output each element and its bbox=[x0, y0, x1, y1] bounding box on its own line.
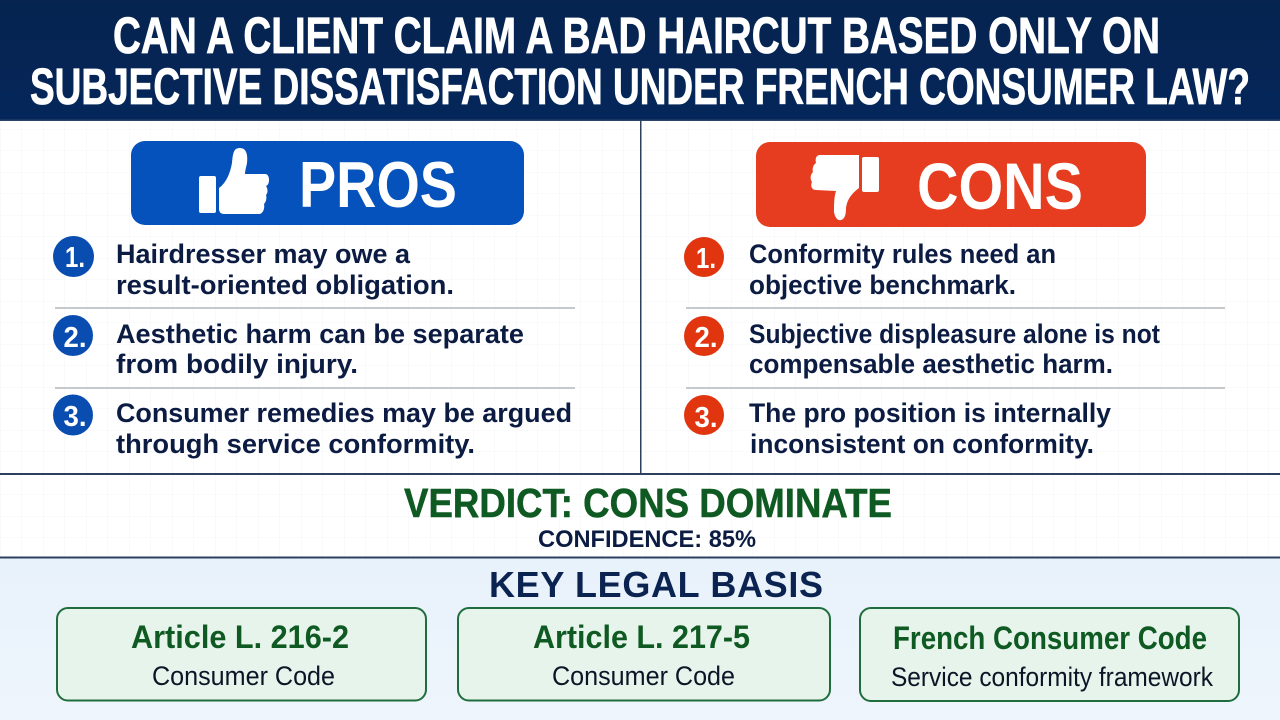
card: french consumer code: Service conformity framework bbox=[891, 662, 1213, 692]
con item 1 bbox=[684, 237, 1056, 300]
card: french consumer code bbox=[860, 608, 1239, 701]
icon: thumbs up bbox=[199, 148, 269, 214]
pro item 2 bbox=[53, 315, 524, 379]
con item 2: Subjective displeasure alone is not bbox=[749, 319, 1160, 349]
panel: cons bbox=[684, 142, 1225, 459]
panel: pros bbox=[53, 141, 575, 459]
con item 1: Conformity rules need an bbox=[749, 239, 1056, 269]
pro item 3 bbox=[53, 394, 572, 459]
icon: thumbs down bbox=[811, 155, 879, 220]
pro item 3: Consumer remedies may be argued bbox=[116, 398, 572, 428]
con item 3: The pro position is internally bbox=[749, 398, 1111, 428]
con item 1: objective benchmark. bbox=[749, 270, 1016, 300]
pro item 3: 3. bbox=[64, 401, 86, 433]
verdict bbox=[404, 480, 892, 553]
pro item 2: Aesthetic harm can be separate bbox=[116, 319, 524, 349]
card: article L. 216-2 bbox=[57, 608, 426, 700]
pro item 2: from bodily injury. bbox=[116, 349, 358, 379]
con item 2: 2. bbox=[694, 322, 718, 354]
key legal basis heading: KEY LEGAL BASIS bbox=[489, 564, 823, 605]
pro item 1: result-oriented obligation. bbox=[116, 270, 454, 300]
con item 3 bbox=[684, 395, 1111, 459]
panel: key legal basis bbox=[0, 556, 1280, 720]
pros heading badge bbox=[131, 141, 524, 225]
pro item 1 bbox=[53, 236, 454, 300]
card: article L. 217-5: Consumer Code bbox=[552, 661, 735, 691]
cons heading badge bbox=[756, 142, 1146, 227]
pro item 1: Hairdresser may owe a bbox=[116, 239, 411, 269]
title banner bbox=[0, 0, 1280, 121]
con item 1: 1. bbox=[696, 243, 716, 275]
pros heading badge: PROS bbox=[299, 148, 457, 221]
pro item 1: 1. bbox=[65, 242, 85, 274]
con item 3: 3. bbox=[694, 402, 718, 434]
card: article L. 216-2: Article L. 216-2 bbox=[131, 619, 349, 655]
con item 3: inconsistent on conformity. bbox=[750, 429, 1094, 459]
con item 2: compensable aesthetic harm. bbox=[749, 349, 1113, 379]
pro item 3: through service conformity. bbox=[116, 429, 475, 459]
pro item 2: 2. bbox=[64, 322, 86, 354]
cons heading badge: CONS bbox=[917, 149, 1083, 223]
con item 2 bbox=[684, 316, 1160, 379]
card: french consumer code: French Consumer Code bbox=[893, 620, 1207, 656]
verdict: VERDICT: CONS DOMINATE bbox=[404, 480, 892, 526]
card: article L. 217-5 bbox=[458, 608, 830, 700]
card: article L. 217-5: Article L. 217-5 bbox=[533, 619, 750, 655]
card: article L. 216-2: Consumer Code bbox=[152, 661, 335, 691]
verdict: CONFIDENCE: 85% bbox=[538, 526, 756, 553]
